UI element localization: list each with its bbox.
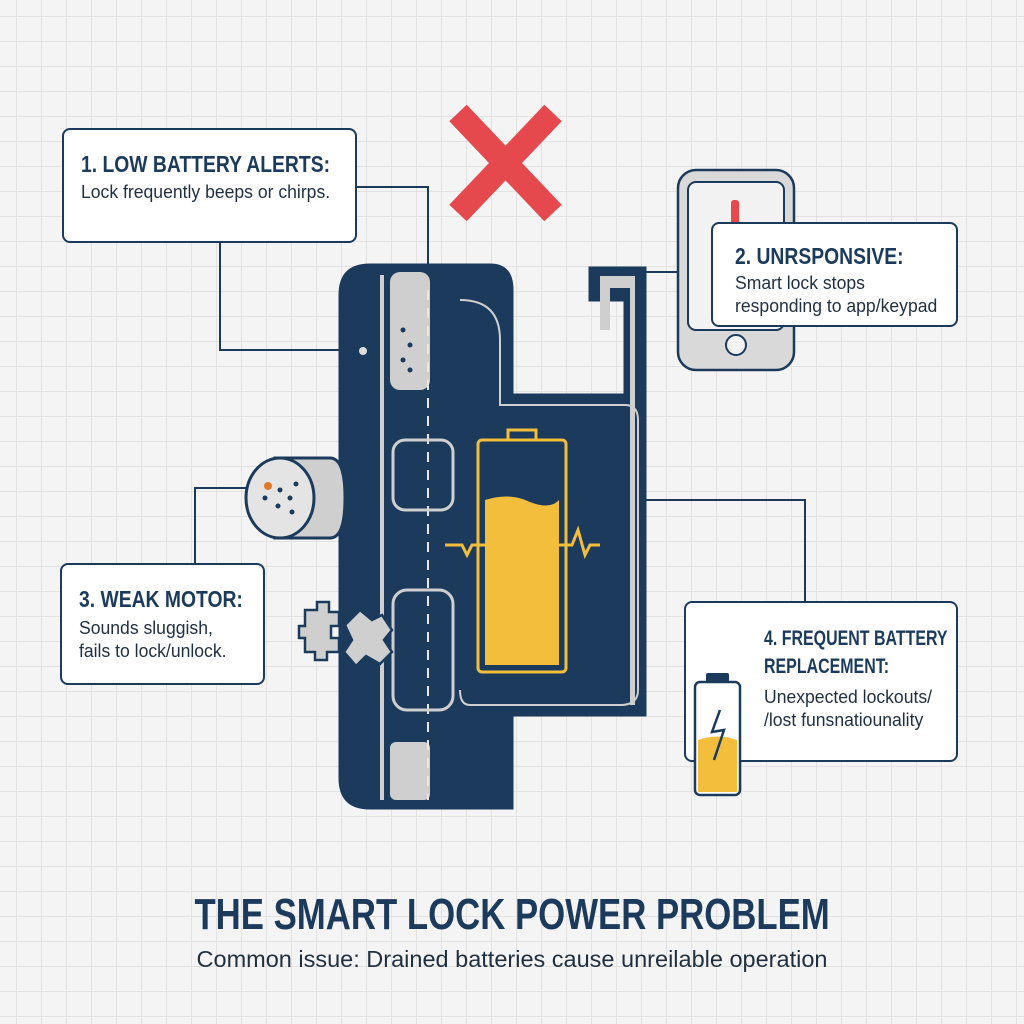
callout 3 bbox=[60, 563, 265, 685]
motor cylinder bbox=[246, 458, 345, 538]
red X bbox=[458, 113, 553, 213]
callout 2: responding to app/keypad bbox=[735, 295, 937, 316]
battery in lock bbox=[445, 430, 600, 672]
broken gears bbox=[299, 602, 392, 666]
smart lock body bbox=[340, 265, 645, 808]
callout 1: Lock frequently beeps or chirps. bbox=[81, 181, 330, 202]
callout 4: 4. FREQUENT BATTERY bbox=[764, 627, 948, 650]
small battery icon bbox=[694, 673, 742, 796]
callout 3: 3. WEAK MOTOR: bbox=[79, 586, 243, 612]
callout 3: fails to lock/unlock. bbox=[79, 640, 227, 661]
subtitle: Common issue: Drained batteries cause unreilable operation bbox=[197, 946, 827, 972]
callout 2 bbox=[711, 222, 958, 327]
phone icon bbox=[678, 170, 794, 370]
callout 4 bbox=[684, 601, 958, 762]
callout 1: 1. LOW BATTERY ALERTS: bbox=[81, 151, 330, 177]
callout 2: Smart lock stops bbox=[735, 272, 865, 293]
callout 4: REPLACEMENT: bbox=[764, 655, 889, 678]
callout 1 bbox=[62, 128, 357, 243]
callout 3: Sounds sluggish, bbox=[79, 617, 213, 638]
connector lines bbox=[195, 187, 805, 601]
callout 4: Unexpected lockouts/ bbox=[764, 686, 932, 707]
title: THE SMART LOCK POWER PROBLEM bbox=[194, 890, 830, 939]
callout 4: /lost funsnatiounality bbox=[764, 709, 923, 730]
callout 2: 2. UNRSPONSIVE: bbox=[735, 243, 904, 269]
